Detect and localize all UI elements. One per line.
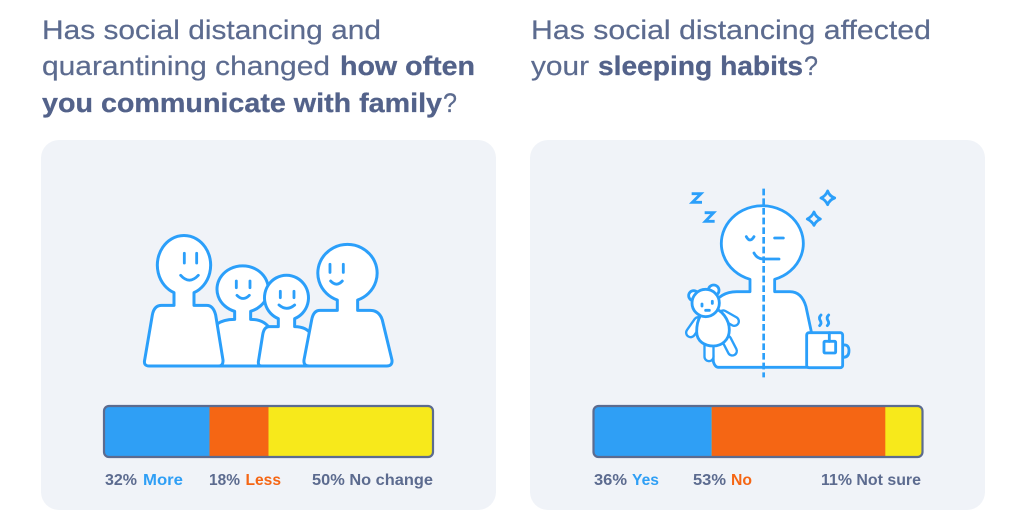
legend: sleeping habits: Yes [632, 472, 659, 489]
heading: family communication question [42, 15, 475, 118]
heading: family communication question: ? [443, 88, 457, 118]
sparkles [807, 191, 835, 225]
mug with tea [807, 315, 849, 368]
child figure right [258, 275, 317, 366]
teddy bear [689, 285, 734, 357]
heading: family communication question: quarantining changed [42, 51, 330, 81]
zzz letters [692, 194, 715, 221]
heading: family communication question: how often [340, 51, 475, 81]
heading: family communication question: you communicate with family [42, 88, 442, 118]
stacked bar: family communication [104, 406, 433, 457]
legend: sleeping habits: No [731, 472, 752, 489]
legend: sleeping habits [594, 472, 921, 489]
legend: family communication: 50% No change [312, 472, 433, 489]
person body [712, 206, 812, 367]
heading: sleeping habits question: ? [804, 51, 818, 81]
heading: family communication question: Has social distancing and [42, 15, 381, 45]
panel: sleeping habits [530, 140, 985, 510]
adult figure left [144, 235, 223, 366]
icon: family of four [144, 235, 392, 366]
face [746, 237, 783, 259]
dashed divider line [760, 189, 768, 377]
legend: family communication [105, 472, 433, 489]
heading: sleeping habits question: sleeping habits [598, 51, 803, 81]
heading: sleeping habits question: your [531, 51, 589, 81]
legend: sleeping habits: 36% [594, 472, 627, 489]
heading: sleeping habits question [531, 15, 931, 81]
adult figure right [304, 244, 392, 366]
legend: family communication: 32% [105, 472, 137, 489]
legend: family communication: More [143, 472, 183, 489]
icon: half-asleep half-awake person [689, 189, 849, 377]
legend: sleeping habits: 11% Not sure [821, 472, 921, 489]
legend: sleeping habits: 53% [693, 472, 726, 489]
heading: sleeping habits question: Has social distancing affected [531, 15, 931, 45]
legend: family communication: 18% [209, 472, 240, 489]
stacked bar: sleeping habits [594, 406, 922, 457]
child figure left [213, 266, 273, 366]
panel: family communication [41, 140, 496, 510]
legend: family communication: Less [246, 472, 281, 489]
